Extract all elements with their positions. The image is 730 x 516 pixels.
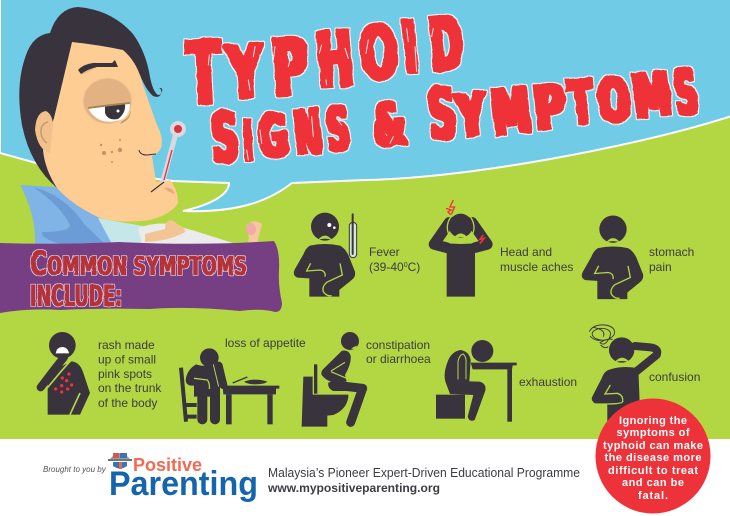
- banner heading: INCLUDE:: [30, 279, 122, 313]
- icon: loss of appetite: [181, 348, 279, 424]
- footer credit: Brought to you by: [43, 465, 107, 474]
- label: head and muscle aches: muscle aches: [500, 260, 573, 274]
- callout: warning circle: difficult to treat: [608, 465, 698, 477]
- icon: rash: [41, 332, 90, 415]
- title line: Typhoid: H: [314, 15, 356, 105]
- title line: Typhoid: P: [269, 23, 312, 114]
- icon: confusion: [589, 325, 657, 427]
- banner heading: COMMON SYMPTOMS: [30, 244, 247, 284]
- title line: Signs & Symptoms: O: [594, 64, 634, 137]
- title line: Signs & Symptoms: I: [242, 109, 254, 173]
- label: fever: C): [408, 260, 420, 274]
- label: stomach pain: stomach: [649, 245, 694, 259]
- title line: Signs & Symptoms: &: [370, 90, 408, 160]
- callout: warning circle: symptoms of: [616, 427, 690, 439]
- hand: [145, 220, 185, 242]
- icon: head and muscle aches: [434, 200, 487, 297]
- hair: [19, 7, 162, 188]
- speech bubble sky: [0, 0, 730, 211]
- title line: Typhoid: T: [185, 23, 223, 125]
- label: exhaustion: exhaustion: [519, 375, 577, 389]
- label: loss of appetite: loss of appetite: [225, 336, 306, 350]
- footer white band: [0, 439, 730, 516]
- panel: common symptoms banner: [0, 241, 282, 313]
- label: fever: 0: [404, 262, 408, 269]
- title: [185, 1, 702, 178]
- icon: scribble: [589, 325, 614, 348]
- eyebrow: [78, 60, 118, 74]
- title line: Signs & Symptoms: M: [489, 75, 534, 150]
- illustration: sick man in bed: [19, 7, 262, 244]
- icon: exhaustion: [436, 340, 517, 422]
- title line: Typhoid: D: [426, 1, 466, 87]
- blanket: [138, 224, 236, 244]
- label: rash: pink spots: [98, 367, 152, 381]
- toes: [246, 221, 262, 244]
- label: rash: on the trunk: [98, 381, 162, 395]
- label: rash: rash made: [98, 338, 155, 352]
- title line: Signs & Symptoms: Y: [453, 82, 489, 150]
- face: [43, 42, 178, 222]
- label: rash: up of small: [98, 352, 156, 366]
- callout: warning circle: Ignoring the: [619, 415, 687, 427]
- title line: Typhoid: [185, 1, 466, 125]
- brow shadow: [78, 62, 96, 75]
- logo word: Positive: Positive: [133, 455, 202, 475]
- icon: fever: [294, 213, 357, 297]
- title line: Signs & Symptoms: S: [210, 98, 240, 178]
- logo word: Parenting: Parenting: [109, 465, 258, 503]
- title line: Signs & Symptoms: [210, 57, 702, 178]
- icon: thermometer: [349, 213, 357, 258]
- title line: Typhoid: Y: [224, 30, 267, 115]
- title line: Signs & Symptoms: G: [256, 103, 290, 171]
- title line: Signs & Symptoms: T: [566, 67, 596, 138]
- toe nail: [246, 223, 256, 235]
- title line: Typhoid: I: [399, 6, 421, 90]
- label: fever: Fever: [369, 245, 400, 259]
- title line: Signs & Symptoms: P: [531, 72, 569, 143]
- title line: Signs & Symptoms: N: [292, 97, 324, 168]
- callout: warning circle: [596, 398, 710, 514]
- website: www.mypositiveparenting.org: [267, 481, 440, 495]
- label: fever: (39-40: [369, 260, 404, 274]
- callout: warning circle: fatal.: [638, 490, 668, 502]
- callout: warning circle: and can be: [622, 477, 684, 489]
- thermometer in mouth: [163, 121, 186, 181]
- ear: [35, 111, 53, 153]
- eye bag: [84, 78, 132, 124]
- logo: Positive Parenting: [108, 453, 258, 503]
- nose line: [139, 150, 156, 155]
- label: rash: of the body: [98, 396, 157, 410]
- label: head and muscle aches: Head and: [500, 245, 552, 259]
- title line: Signs & Symptoms: S: [426, 74, 459, 156]
- logo emblem: [108, 453, 132, 469]
- label: constipation: constipation: [366, 338, 430, 352]
- mouth: [151, 182, 175, 194]
- collar: [98, 218, 146, 244]
- title line: Signs & Symptoms: S: [324, 94, 352, 165]
- icon: stomach pain: [582, 215, 643, 299]
- label: stomach pain: pain: [649, 260, 672, 274]
- label: confusion: confusion: [649, 370, 700, 384]
- callout: warning circle: typhoid can make: [603, 440, 703, 452]
- freckles: [100, 139, 122, 163]
- banner heading: [30, 244, 247, 313]
- icon: constipation: [302, 332, 367, 427]
- title line: Signs & Symptoms: M: [629, 59, 675, 132]
- pillow: [20, 185, 114, 244]
- title line: Typhoid: O: [356, 9, 402, 97]
- label: constipation: or diarrhoea: [366, 352, 431, 366]
- ear inner: [41, 122, 48, 143]
- tagline: Malaysia’s Pioneer Expert-Driven Educational Programme: [268, 466, 580, 480]
- eye: [88, 103, 130, 122]
- title line: Signs & Symptoms: S: [671, 57, 702, 130]
- callout: warning circle: the disease more: [604, 452, 702, 464]
